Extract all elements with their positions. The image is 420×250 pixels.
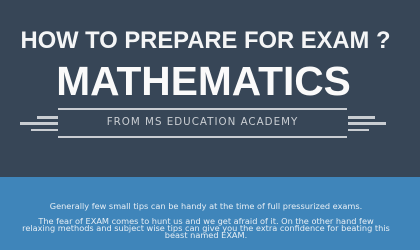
panel: introduction <box>0 177 420 250</box>
heading: how to prepare: HOW TO PREPARE FOR EXAM ? <box>21 27 390 54</box>
intro paragraph <box>22 216 390 240</box>
intro paragraph: relaxing methods and subject wise tips can give you the extra confidence for beating this <box>22 223 390 233</box>
banner subtitle: FROM MS EDUCATION ACADEMY <box>107 116 298 128</box>
intro paragraph: The fear of EXAM comes to hunt us and we get afraid of it. On the other hand few <box>38 216 374 226</box>
panel: header <box>0 0 420 177</box>
title: mathematics: MATHEMATICS <box>56 58 351 104</box>
intro text line: Generally few small tips can be handy at the time of full pressurized exams. <box>50 201 362 211</box>
intro paragraph: beast named EXAM. <box>165 230 247 240</box>
